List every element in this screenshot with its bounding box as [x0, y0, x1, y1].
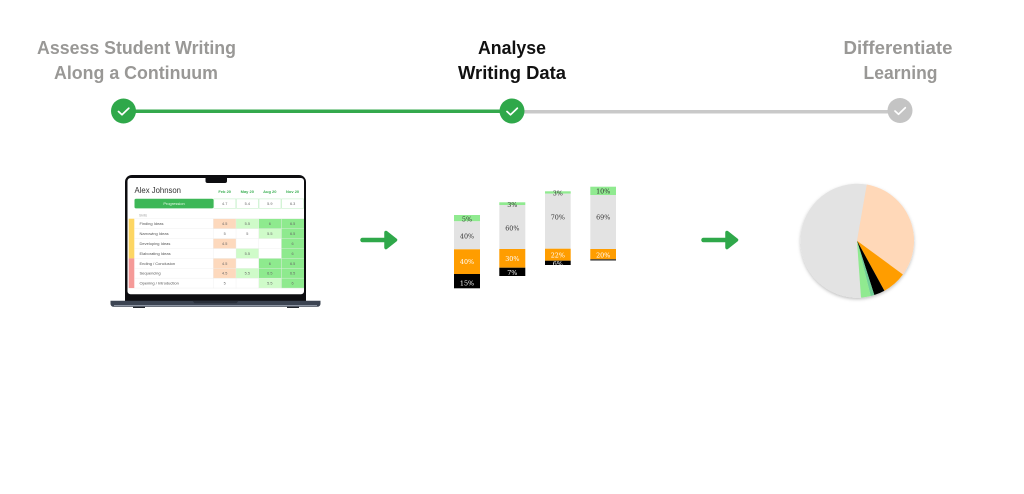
progression scores: 5.9	[267, 202, 272, 206]
skill scores: 6	[269, 222, 271, 226]
heading: step 2	[458, 37, 567, 83]
skills label: Skills	[139, 214, 147, 218]
bar 1: 40%	[460, 232, 474, 240]
bar 3: 22%	[551, 251, 565, 259]
student name: Alex Johnson	[134, 185, 181, 195]
heat-map cells	[134, 219, 304, 288]
bar 1: 40%	[460, 258, 474, 266]
skill scores: 6	[292, 252, 294, 256]
skill row labels: Ending / Conclusion	[140, 261, 175, 266]
skill scores: 5.5	[267, 282, 272, 286]
skill scores: 6.5	[267, 272, 272, 276]
skill scores: 6.5	[290, 262, 295, 266]
bar 2: 3%	[507, 201, 517, 209]
month headers: Aug 20	[263, 189, 277, 194]
bar 3	[545, 190, 571, 268]
bar 2: 30%	[505, 255, 519, 263]
laptop bezel	[125, 175, 306, 301]
bar 4: 20%	[596, 251, 610, 259]
laptop screen	[128, 178, 304, 294]
arrow: laptop to bars	[362, 232, 396, 248]
icon: step 3 check	[888, 98, 912, 123]
bar 3: 70%	[551, 213, 565, 221]
icon: step 2 check	[500, 98, 524, 124]
heading: step 3: Learning	[864, 62, 938, 83]
bar 2	[499, 201, 525, 277]
skill scores: 6	[292, 242, 294, 246]
skill scores: 5.5	[245, 222, 250, 226]
laptop base	[110, 301, 320, 307]
heading: step 1: Along a Continuum	[54, 62, 218, 83]
skill scores: 4.5	[222, 222, 227, 226]
heading: step 3	[844, 37, 952, 83]
laptop with student data table	[110, 175, 320, 308]
skill row labels	[140, 221, 179, 286]
bar 4	[590, 187, 616, 260]
skill scores: 5	[224, 232, 226, 236]
skill scores: 6.5	[290, 272, 295, 276]
skill scores: 4.5	[222, 262, 227, 266]
bar 3: 3%	[553, 190, 563, 198]
category bar: yellow	[129, 219, 134, 258]
skill scores: 5.5	[267, 232, 272, 236]
heading: step 1: Assess Student Writing	[37, 37, 236, 58]
bar 4: 69%	[596, 213, 610, 221]
pie chart	[800, 184, 914, 298]
progress line: remaining	[512, 110, 900, 114]
skill scores: 6	[292, 282, 294, 286]
skill row labels: Opening / Introduction	[140, 281, 179, 286]
skill scores: 5.5	[245, 252, 250, 256]
base highlight	[114, 305, 317, 306]
arrow: bars to pie	[704, 232, 736, 248]
skill scores: 6.5	[290, 222, 295, 226]
month headers: Feb 20	[218, 189, 232, 194]
skill scores: 5.5	[245, 272, 250, 276]
progression button	[134, 199, 214, 208]
progression scores: 4.7	[222, 202, 227, 206]
month headers: Nov 20	[286, 189, 300, 194]
skill scores: 6.5	[290, 232, 295, 236]
skill scores	[222, 222, 295, 286]
skill row labels: Finding Ideas	[140, 221, 164, 226]
skill row labels: Elaborating Ideas	[140, 251, 171, 256]
progression scores: 6.3	[290, 202, 295, 206]
laptop feet	[133, 307, 299, 308]
bar 2: 60%	[505, 224, 519, 232]
bar 1: 5%	[462, 215, 472, 223]
skill row labels: Narrowing Ideas	[140, 231, 169, 236]
month headers: May 20	[241, 189, 255, 194]
skill scores: 5	[246, 232, 248, 236]
progression scores: 5.4	[245, 202, 250, 206]
progress line: completed	[123, 110, 512, 113]
skill row labels: Developing Ideas	[140, 241, 170, 246]
category bar: red	[129, 258, 134, 288]
heading: step 2: Analyse	[478, 37, 546, 58]
heading: step 1	[37, 37, 236, 83]
skill scores: 5	[224, 282, 226, 286]
stacked bar chart	[454, 187, 616, 288]
bar 1: 15%	[460, 279, 474, 287]
heading: step 3: Differentiate	[844, 37, 952, 58]
bar 3: 6%	[553, 260, 563, 268]
bar 2: 7%	[507, 269, 517, 277]
progression button: Progression	[163, 201, 185, 206]
bar 1	[454, 215, 480, 288]
skill scores: 4.5	[222, 242, 227, 246]
heading: step 2: Writing Data	[458, 62, 567, 83]
camera notch	[206, 178, 227, 183]
icon: step 1 check	[111, 98, 136, 124]
base hinge notch	[192, 301, 238, 303]
skill row labels: Sequencing	[140, 271, 161, 276]
progression scores	[214, 199, 304, 208]
month headers	[218, 189, 300, 194]
skill scores: 6	[269, 262, 271, 266]
skill scores: 4.5	[222, 272, 227, 276]
bar 4: 10%	[596, 187, 610, 195]
